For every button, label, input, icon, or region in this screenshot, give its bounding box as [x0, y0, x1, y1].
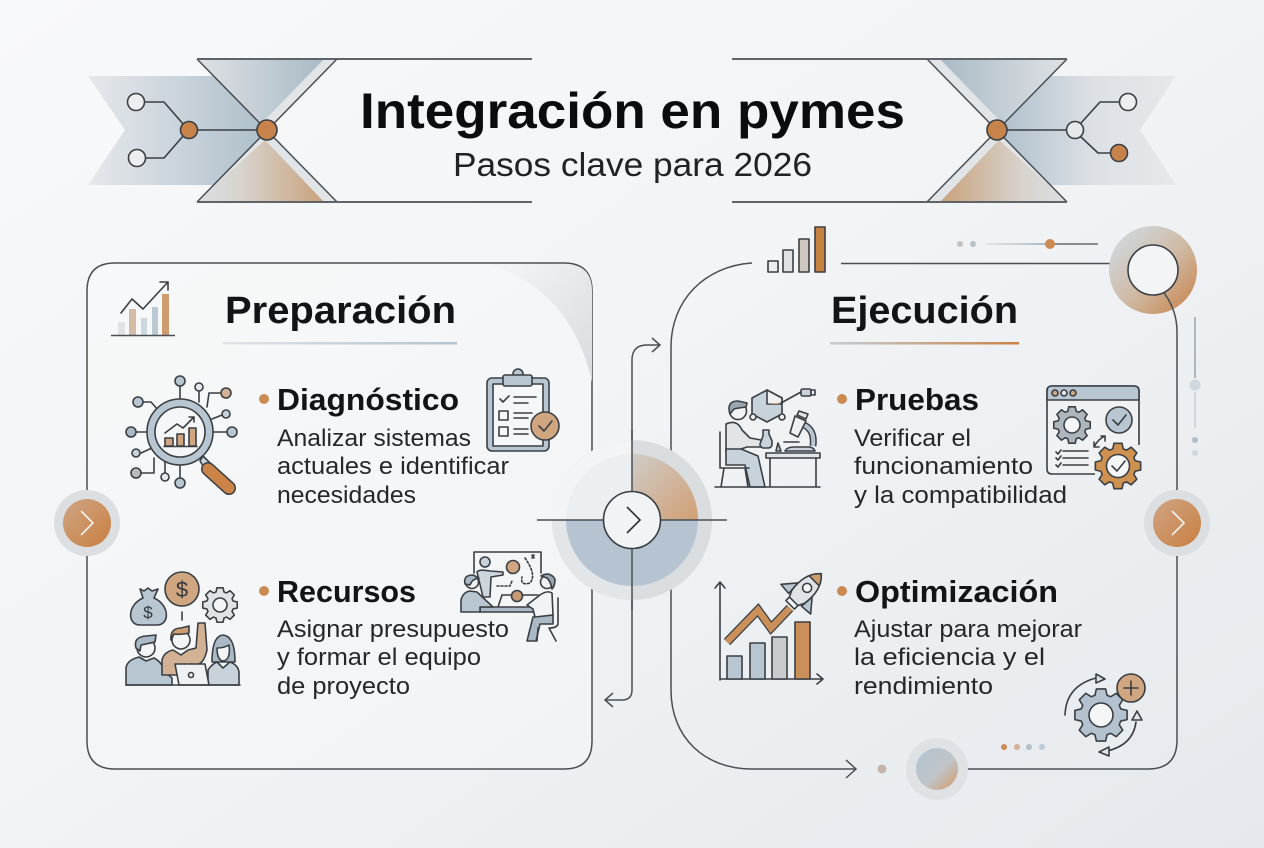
person left: [126, 635, 172, 685]
step: pruebas: [837, 382, 1067, 509]
connector line with arrows: [605, 338, 660, 707]
step: recursos: [259, 574, 509, 700]
description: [277, 425, 509, 509]
network nodes: right: [987, 94, 1136, 162]
icon: clipboard: [487, 369, 559, 451]
icon: budget and team: [126, 572, 240, 685]
scientist: [720, 401, 765, 487]
icon: growth chart: [111, 282, 175, 336]
side track: [1190, 317, 1200, 456]
bullet: [837, 586, 847, 596]
flask: [760, 430, 772, 448]
description: Verificar el: [854, 425, 971, 452]
button: left arrow: [54, 490, 120, 556]
pagination dots: [1001, 744, 1045, 750]
bars: [727, 622, 810, 679]
bullet: [259, 394, 269, 404]
icon: team meeting: [461, 552, 558, 641]
person centre: [162, 623, 207, 675]
description: [854, 425, 1067, 509]
ribbon: left: [88, 76, 267, 185]
network nodes: left: [128, 94, 277, 166]
description: y formar el equipo: [277, 644, 481, 671]
heading: Pruebas: [855, 382, 979, 417]
heading: Optimización: [855, 574, 1058, 609]
description: necesidades: [277, 482, 416, 509]
subtitle: Pasos clave para 2026: [453, 146, 812, 183]
money bag: $: [143, 603, 153, 622]
description: funcionamiento: [854, 453, 1033, 480]
header banner: [88, 59, 1176, 202]
icon: magnifier network: [126, 376, 237, 488]
panel: ejecución: [671, 226, 1200, 800]
panel outline: [87, 263, 592, 769]
central disc: [537, 430, 727, 610]
description: de proyecto: [277, 673, 410, 700]
laptop: [126, 664, 240, 685]
small dot: [878, 764, 886, 774]
ribbon: right: [997, 76, 1176, 185]
heading: Recursos: [277, 574, 416, 609]
icon: gear cycle: [1065, 674, 1145, 756]
icon: growth rocket: [715, 559, 836, 684]
heading underline: [830, 342, 1019, 344]
heading: Diagnóstico: [277, 382, 459, 417]
bullet: [259, 586, 269, 596]
coin: $: [176, 577, 188, 602]
description: [854, 616, 1082, 700]
icon: signal bars: [768, 227, 825, 272]
icon: laboratory: [715, 389, 820, 487]
description: y la compatibilidad: [854, 482, 1067, 509]
hourglass: right: [732, 59, 1067, 202]
title: Integración en pymes: [360, 83, 905, 139]
description: la eficiencia y el: [854, 644, 1045, 671]
ring: [1109, 226, 1197, 490]
hourglass: left: [197, 59, 532, 202]
step: optimización: [837, 574, 1082, 700]
description: Analizar sistemas: [277, 425, 471, 452]
panel: preparación: [87, 263, 592, 769]
bottom node: [906, 738, 968, 800]
axes: [715, 582, 823, 684]
description: [277, 616, 509, 700]
slider: [957, 239, 1098, 249]
description: Asignar presupuesto: [277, 616, 509, 643]
button: right arrow: [1144, 490, 1210, 556]
table: [715, 443, 820, 487]
heading: ejecución: Ejecución: [831, 290, 1018, 332]
panel outline: [671, 263, 1177, 778]
icon: software window: [1047, 386, 1141, 489]
rocket: [775, 559, 836, 620]
central connector: [537, 338, 727, 707]
corner decoration: [490, 264, 592, 382]
heading: preparación: Preparación: [225, 290, 456, 332]
central arrow button: [604, 492, 660, 548]
gear: [203, 588, 237, 622]
step: diagnóstico: [259, 382, 509, 509]
description: rendimiento: [854, 673, 993, 700]
person right: [208, 635, 239, 685]
hexagon and plug: [750, 389, 815, 422]
description: Ajustar para mejorar: [854, 616, 1082, 643]
trend band: [727, 608, 790, 642]
microscope: [784, 411, 815, 451]
heading underline: [223, 342, 457, 344]
bullet: [837, 394, 847, 404]
description: actuales e identificar: [277, 453, 509, 480]
